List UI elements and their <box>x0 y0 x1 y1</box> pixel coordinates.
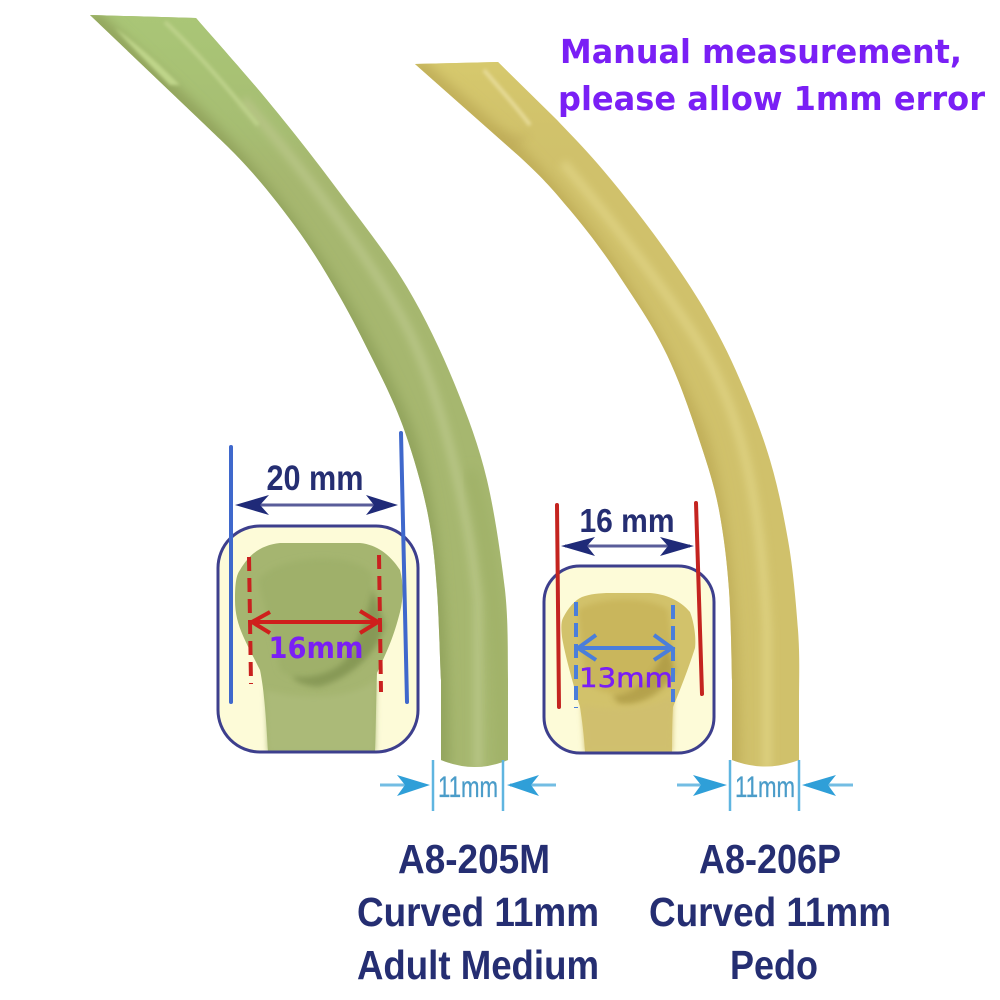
11mm dimension: green tube: 11mm <box>438 771 498 804</box>
label: A8-205M <box>357 836 599 988</box>
20 mm dimension <box>231 433 407 702</box>
yellow curved tube <box>405 50 810 780</box>
13mm inner dimension: 13mm <box>579 663 673 694</box>
16mm inner dimension: 16mm <box>268 631 364 665</box>
top note: please allow 1mm error <box>558 79 986 118</box>
adult tube mouth <box>235 543 403 752</box>
label: A8-205M: A8-205M <box>398 836 550 882</box>
16mm inner dimension <box>249 555 381 692</box>
label: A8-205M: Curved 11mm <box>357 889 599 935</box>
green curved tube <box>80 0 520 780</box>
top note: Manual measurement, <box>560 32 962 71</box>
13mm inner dimension <box>576 602 673 708</box>
11mm dimension: green tube <box>380 760 556 811</box>
11mm dimension: yellow tube: 11mm <box>735 771 795 804</box>
16 mm dimension <box>557 502 702 707</box>
top note <box>558 32 986 118</box>
label: A8-206P <box>649 836 891 988</box>
pedo tube mouth <box>561 593 695 752</box>
20 mm dimension: 20 mm <box>266 459 364 498</box>
label: A8-206P: Pedo <box>730 942 818 988</box>
label: A8-206P: A8-206P <box>699 836 841 882</box>
label: A8-206P: Curved 11mm <box>649 889 891 935</box>
16 mm dimension: 16 mm <box>580 502 674 539</box>
11mm dimension: yellow tube <box>677 760 853 811</box>
label: A8-205M: Adult Medium <box>357 942 599 988</box>
inset: pedo tube opening <box>544 502 714 753</box>
inset: adult tube opening <box>218 433 418 752</box>
